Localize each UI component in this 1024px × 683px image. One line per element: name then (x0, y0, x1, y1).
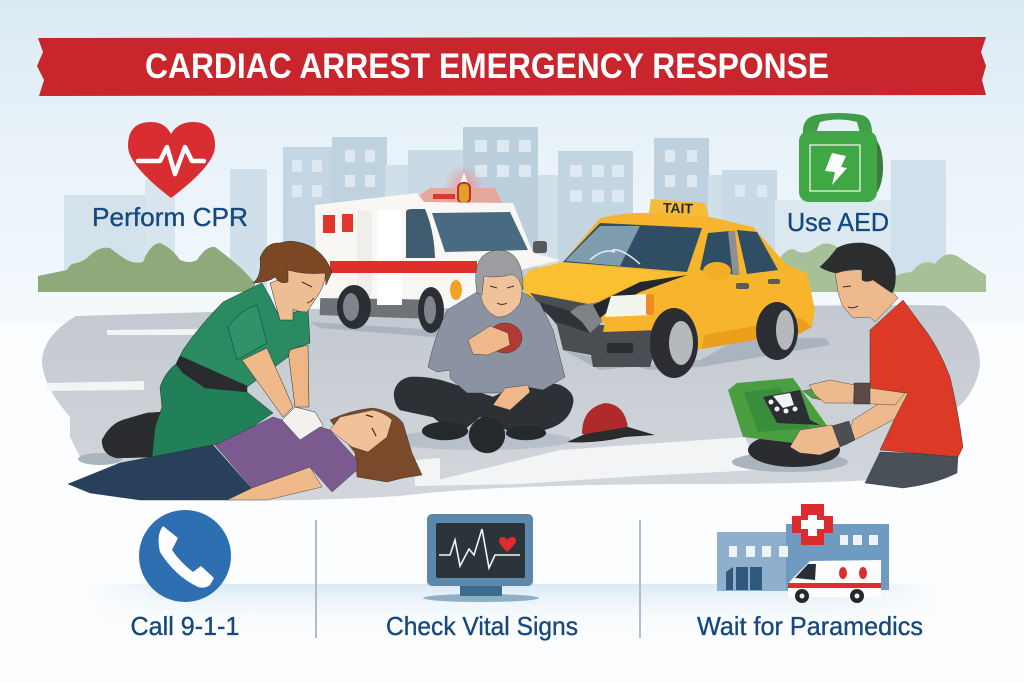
taxi sign (649, 199, 709, 217)
lower hand (790, 425, 840, 455)
heading: CARDIAC ARREST EMERGENCY RESPONSE (145, 46, 829, 86)
taxi (520, 199, 815, 378)
pants (865, 452, 958, 488)
shirt (870, 300, 963, 457)
windshield (563, 223, 702, 272)
upper hand (809, 380, 855, 403)
legs crossed (394, 377, 573, 434)
lower door shading (702, 318, 812, 349)
icon: hospital with ambulance (717, 504, 889, 603)
gray frame (320, 296, 430, 319)
patient lying on ground (68, 408, 422, 500)
road (42, 305, 980, 500)
belt (176, 356, 247, 392)
wristbands (854, 383, 870, 404)
label: Perform CPR: Perform CPR (92, 202, 248, 232)
red cap on road (567, 403, 655, 442)
face (330, 410, 392, 452)
icon: vital signs monitor (423, 514, 539, 602)
boots (102, 412, 175, 458)
lower arm (845, 390, 908, 445)
red stripe (330, 261, 477, 273)
hair (820, 243, 896, 293)
label: Use AED: Use AED (787, 207, 889, 237)
road shadows (78, 322, 848, 472)
banner (37, 37, 986, 96)
handle (803, 386, 833, 402)
label: Call 9-1-1: Call 9-1-1 (130, 611, 240, 641)
front arm (242, 348, 293, 417)
hair (253, 241, 332, 285)
rescuer in green (102, 241, 332, 458)
bumper and grille (530, 293, 660, 367)
car body (520, 213, 815, 352)
icon: heart with pulse (128, 122, 215, 198)
AED open case on ground (728, 378, 840, 467)
background sky (0, 0, 1024, 293)
red cross sign (792, 504, 833, 545)
hood (520, 262, 687, 303)
gloves (282, 407, 323, 440)
jeans (68, 445, 253, 500)
ambulance body (315, 193, 560, 300)
hands (468, 326, 510, 355)
divider (639, 520, 641, 638)
arm (227, 467, 322, 500)
upper arm (853, 385, 905, 405)
icon: AED device (799, 113, 883, 202)
small ambulance (788, 560, 881, 597)
torso (428, 292, 565, 393)
taxi: TAIT (663, 199, 694, 217)
bottom tinted band (112, 584, 914, 610)
pants (152, 363, 273, 457)
neck and face (835, 268, 898, 322)
city skyline (64, 127, 946, 292)
skyline windows (292, 140, 767, 202)
head (481, 272, 522, 317)
label: Check Vital Signs: Check Vital Signs (386, 611, 578, 641)
hair behind (330, 408, 422, 482)
headlight (605, 294, 653, 317)
road markings (47, 329, 760, 486)
torso (177, 283, 310, 390)
side windows (700, 231, 738, 275)
bushes and grass (38, 243, 986, 292)
icon: phone (139, 510, 231, 602)
wheels (650, 308, 698, 378)
siren (444, 165, 484, 205)
ambulance (315, 165, 560, 333)
wheels (337, 285, 371, 329)
hair (476, 250, 523, 295)
divider (315, 520, 317, 638)
hood crack (593, 275, 687, 318)
rescuer in red with AED (790, 243, 963, 488)
back arm (288, 345, 309, 407)
label: Wait for Paramedics: Wait for Paramedics (697, 611, 923, 641)
torso (215, 417, 357, 492)
neck and face (270, 270, 326, 320)
chest patch (488, 323, 522, 353)
sleeve (228, 305, 267, 360)
seated man (394, 250, 573, 453)
